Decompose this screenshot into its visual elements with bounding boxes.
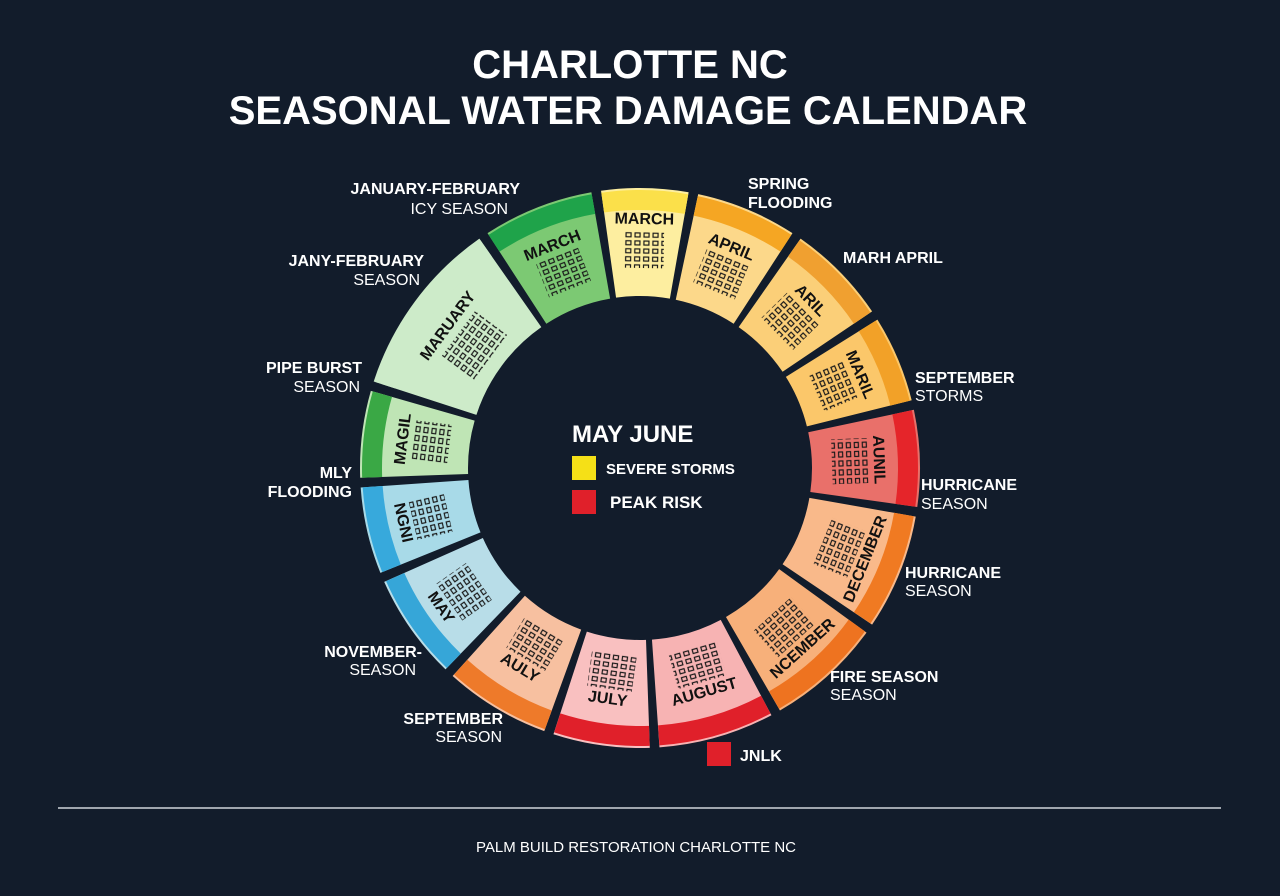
ring chart	[261, 89, 1019, 847]
segment labels and grids: MAY	[424, 589, 457, 627]
segment: Maruary	[302, 130, 978, 806]
outer labels: SEASON	[905, 583, 972, 600]
outer labels: JANUARY-FEBRUARY	[350, 181, 520, 198]
title: CHARLOTTE NC	[472, 43, 788, 87]
segment labels and grids: AULY	[497, 650, 542, 686]
outer labels: HURRICANE	[905, 565, 1001, 582]
outer labels: NOVEMBER-	[324, 644, 422, 661]
outer labels: FLOODING	[268, 484, 352, 501]
segment: yellow March	[337, 165, 943, 771]
segment: April	[322, 150, 958, 786]
segment labels and grids: MARCH	[522, 227, 583, 265]
outer labels: JANY-FEBRUARY	[289, 253, 424, 270]
outer labels	[266, 176, 1017, 746]
outer labels: MARH APRIL	[843, 250, 943, 267]
segment labels and grids: JULY	[587, 688, 629, 710]
segment: July	[363, 191, 917, 745]
outer labels: SEASON	[293, 379, 360, 396]
bottom legend: JNLK: JNLK	[740, 748, 782, 765]
bottom legend: JNLK	[707, 742, 782, 766]
segment labels and grids: NCEMBER	[767, 615, 839, 682]
outer labels: ICY SEASON	[410, 201, 508, 218]
segment labels and grids: ARIL	[791, 282, 829, 320]
footer: PALM BUILD RESTORATION CHARLOTTE NC	[476, 839, 796, 856]
segment labels and grids: DECEMBER	[841, 513, 891, 605]
outer labels: FIRE SEASON	[830, 669, 938, 686]
segment labels and grids: APRIL	[706, 231, 757, 265]
segment labels and grids: AUGUST	[670, 675, 739, 710]
center legend: MAY JUNE	[572, 421, 693, 448]
segment: Ngni	[291, 119, 989, 817]
segment labels and grids: MARCH	[614, 211, 674, 229]
title	[229, 43, 1027, 133]
outer labels: SEASON	[353, 272, 420, 289]
segment: Aril	[267, 95, 1013, 841]
outer labels: SEASON	[435, 729, 502, 746]
center legend: SEVERE STORMS	[606, 461, 735, 478]
segment: Ncember	[266, 94, 1014, 842]
outer labels: SEPTEMBER	[915, 370, 1015, 387]
outer labels: HURRICANE	[921, 477, 1017, 494]
segment labels and grids: MARIL	[842, 348, 877, 402]
outer labels: SEASON	[921, 496, 988, 513]
segment labels and grids: MARUARY	[417, 288, 479, 364]
outer labels: FLOODING	[748, 195, 832, 212]
segment: Magil	[363, 191, 917, 745]
segment labels and grids	[390, 211, 891, 711]
outer labels: SEASON	[830, 687, 897, 704]
segment labels and grids: NGNI	[390, 501, 416, 544]
segment labels and grids: AUNIL	[869, 435, 888, 485]
outer labels: SEPTEMBER	[403, 711, 503, 728]
segment: December	[330, 158, 950, 778]
segment labels and grids: MAGIL	[392, 412, 415, 466]
outer labels: SEASON	[349, 662, 416, 679]
title: SEASONAL WATER DAMAGE CALENDAR	[229, 89, 1027, 133]
segment: green March	[269, 97, 1011, 839]
outer labels: MLY	[320, 465, 352, 482]
segment: Aunil	[322, 150, 958, 786]
segment: Auly	[297, 125, 983, 811]
outer labels: SPRING	[748, 176, 809, 193]
center legend	[572, 421, 735, 514]
segment: May	[261, 89, 1019, 847]
outer labels: PIPE BURST	[266, 360, 362, 377]
segment: August	[278, 106, 1002, 830]
center legend: PEAK RISK	[610, 493, 703, 512]
segment: Maril	[271, 99, 1009, 837]
outer labels: STORMS	[915, 388, 983, 405]
